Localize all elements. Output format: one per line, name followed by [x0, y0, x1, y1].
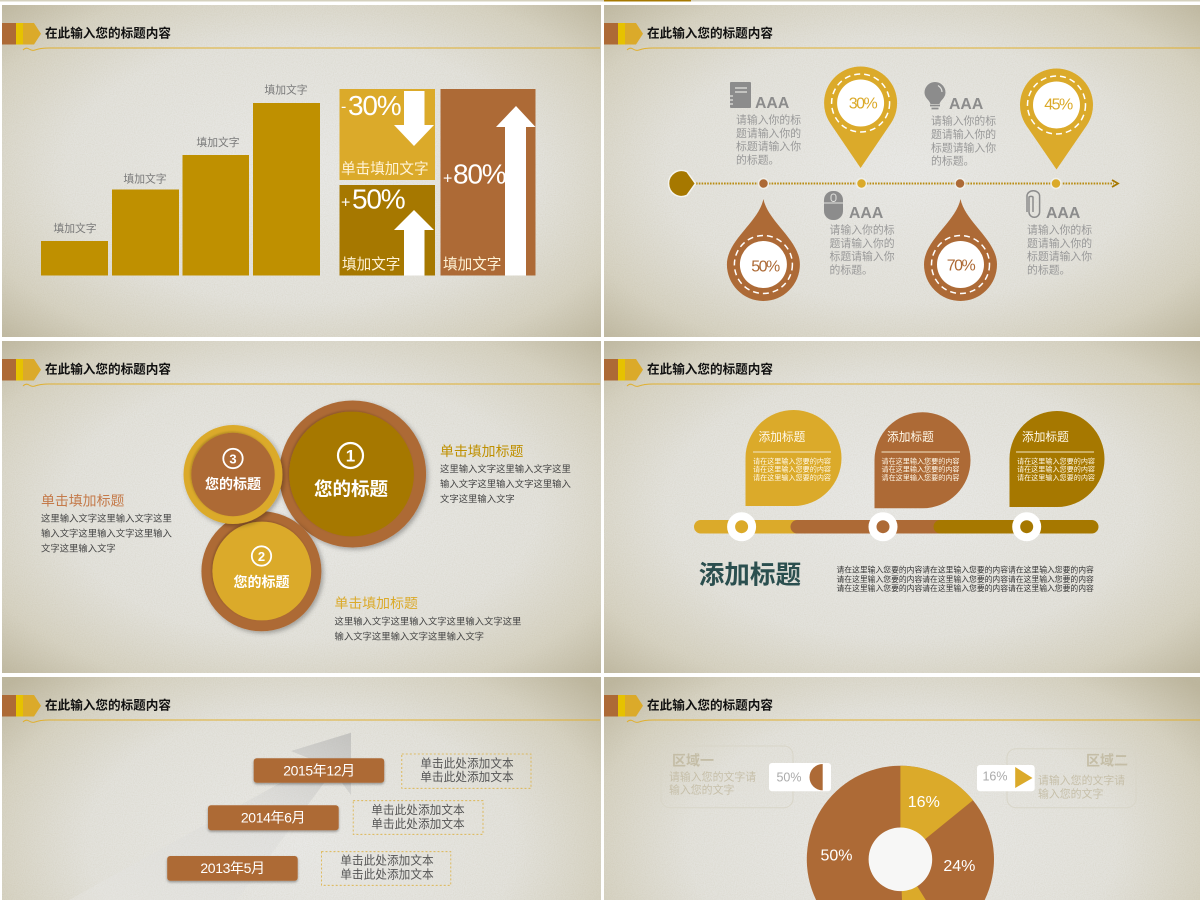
region two: 输入您的文字: [1038, 786, 1103, 800]
stat tile: -30%: [340, 89, 435, 180]
callout 1: 请在这里输入您要的内容: [753, 473, 831, 482]
callout 3: 请在这里输入您要的内容: [1017, 457, 1095, 466]
callout 3: 请在这里输入您要的内容: [1017, 464, 1095, 473]
text block: paper clip: 标题请输入你: [1027, 249, 1092, 263]
text block: notebook: 标题请输入你: [736, 139, 801, 153]
callout 3: 请在这里输入您要的内容: [1017, 473, 1095, 482]
icon: mouse: [824, 191, 843, 220]
text block: bottom: [334, 595, 521, 642]
panel: bar chart slide: [41, 82, 536, 276]
text block: mouse: 题请输入你的: [830, 236, 895, 250]
circle 3: 您的标题: [205, 476, 261, 492]
text block: light bulb: AAA: [949, 96, 983, 113]
text block: left: 输入文字这里输入文字这里输入: [41, 528, 172, 539]
panel: donut chart slide: [661, 746, 1136, 900]
donut chart: [807, 766, 994, 900]
text block: notebook: 请输入你的标: [736, 112, 801, 126]
circle 3: [184, 425, 282, 524]
icon: paper clip: [1027, 191, 1040, 217]
donut chart: 50%: [820, 848, 853, 864]
text block: paper clip: 的标题。: [1027, 262, 1070, 276]
stat tile: +80%: 填加文字: [443, 256, 501, 273]
text block: right: [440, 443, 571, 504]
region two: [1007, 749, 1136, 808]
header: slide 1: [2, 23, 600, 50]
date row 2015: 单击此处添加文本: [420, 756, 514, 770]
circle 1: 1: [346, 446, 355, 466]
circle 1: 您的标题: [314, 478, 388, 500]
circle 2: [201, 511, 321, 631]
callout 2: 添加标题: [887, 430, 934, 444]
header: slide 1: 在此输入您的标题内容: [45, 26, 171, 40]
header: slide 5: 在此输入您的标题内容: [45, 698, 171, 712]
callout 1: 请在这里输入您要的内容: [753, 464, 831, 473]
drop: 70%: 70%: [947, 258, 976, 274]
stat tile: +50%: 50%: [352, 184, 405, 214]
region one: 区域一: [672, 753, 714, 769]
circle 1: [279, 400, 426, 548]
text block: right: 这里输入文字这里输入文字这里: [440, 463, 571, 474]
legend card: 50%: 50%: [776, 770, 802, 784]
segmented progress bar: [694, 516, 1098, 537]
region two: 区域二: [1086, 753, 1128, 769]
header: slide 4: 在此输入您的标题内容: [647, 362, 773, 376]
drop: 50%: 50%: [751, 258, 780, 276]
text block: [836, 564, 1094, 593]
arrow: background growth: [69, 733, 351, 900]
panel: callout timeline slide: [694, 410, 1104, 593]
heading: 添加标题: [699, 560, 801, 590]
text block: notebook: AAA: [755, 95, 789, 112]
text block: mouse: [824, 191, 895, 276]
callout 2: 请在这里输入您要的内容: [882, 473, 960, 482]
stat tile: +50%: [340, 184, 435, 276]
text block: 请在这里输入您要的内容请在这里输入您要的内容请在这里输入您要的内容: [836, 583, 1094, 593]
timeline nodes: [758, 178, 1061, 188]
region two: 请输入您的文字请: [1038, 773, 1125, 787]
text block: bottom: 输入文字这里输入文字这里输入文字: [334, 631, 484, 642]
region one: [661, 746, 793, 808]
callout 1: 添加标题: [758, 430, 806, 444]
bar labels: [53, 82, 308, 235]
bar chart: [41, 103, 320, 276]
pin: 45%: [1020, 69, 1093, 170]
text block: bottom: 这里输入文字这里输入文字这里输入文字这里: [334, 616, 521, 627]
stat tile: +80%: 80%: [453, 158, 506, 190]
callout 2: 请在这里输入您要的内容: [882, 457, 960, 466]
text block: paper clip: [1027, 191, 1092, 276]
date row 2014: [208, 801, 483, 834]
date row 2014: 2014年6月: [241, 810, 305, 826]
text block: notebook: 的标题。: [736, 152, 779, 166]
header: slide 5: [2, 695, 600, 722]
panel: timeline slide: [669, 67, 1118, 301]
stat tile: +50%: +: [341, 194, 350, 212]
region one: 请输入您的文字请: [669, 769, 756, 783]
bar labels: 填加文字: [53, 221, 97, 235]
text block: paper clip: AAA: [1046, 205, 1080, 222]
circle 2: 2: [258, 549, 265, 564]
date row 2015: 2015年12月: [283, 762, 355, 778]
date row 2013: [167, 852, 451, 885]
stat tile: +50%: 填加文字: [342, 256, 400, 273]
circle 2: 您的标题: [234, 574, 290, 590]
text block: right: 输入文字这里输入文字这里输入: [440, 478, 571, 489]
date row 2013: 单击此处添加文本: [340, 854, 434, 868]
text block: left: 文字这里输入文字: [41, 543, 116, 554]
callout 1: [746, 410, 841, 506]
text block: 请在这里输入您要的内容请在这里输入您要的内容请在这里输入您要的内容: [836, 564, 1094, 574]
bar labels: 填加文字: [264, 82, 308, 96]
text block: left: 这里输入文字这里输入文字这里: [41, 513, 172, 524]
date row 2013: 2013年5月: [200, 860, 265, 876]
callout 1: 请在这里输入您要的内容: [753, 457, 831, 466]
text block: paper clip: 请输入你的标: [1027, 222, 1092, 236]
legend card: 50%: [769, 763, 831, 791]
date row 2015: 单击此处添加文本: [420, 770, 514, 784]
text block: left: [41, 493, 172, 554]
pin: 30%: 30%: [849, 96, 878, 112]
panel: circles slide: [41, 400, 571, 642]
donut chart: 16%: [908, 794, 940, 811]
text block: light bulb: 标题请输入你: [931, 140, 996, 154]
header: slide 2: [604, 23, 1200, 50]
legend card: 16%: 16%: [982, 770, 1008, 784]
date row 2013: 单击此处添加文本: [340, 868, 434, 882]
stat tile: +80%: [440, 89, 536, 276]
stat tile: +80%: +: [443, 170, 452, 188]
header: slide 6: [604, 695, 1200, 722]
text block: right: 单击填加标题: [440, 443, 523, 459]
region one: 输入您的文字: [669, 783, 734, 797]
header: slide 4: [604, 359, 1200, 386]
icon: notebook: [730, 82, 751, 108]
stat tile: -30%: -: [341, 98, 346, 116]
header: slide 3: 在此输入您的标题内容: [45, 362, 171, 376]
text block: light bulb: 请输入你的标: [931, 114, 996, 128]
text block: light bulb: 的标题。: [931, 154, 974, 168]
text block: mouse: 标题请输入你: [830, 249, 895, 263]
pin: 45%: 45%: [1044, 96, 1073, 114]
stat tile: -30%: 单击填加文字: [341, 160, 429, 178]
callout 3: [1010, 411, 1104, 507]
text block: mouse: 的标题。: [830, 262, 873, 276]
date row 2014: 单击此处添加文本: [371, 803, 465, 817]
icon: light bulb: [924, 82, 946, 108]
bar labels: 填加文字: [123, 172, 167, 186]
text block: paper clip: 题请输入你的: [1027, 236, 1092, 250]
timeline dotted axis: [696, 180, 1118, 187]
panel: date timeline slide: [69, 733, 531, 900]
callout 2: 请在这里输入您要的内容: [882, 464, 960, 473]
text block: right: 文字这里输入文字: [440, 493, 515, 504]
text block: 请在这里输入您要的内容请在这里输入您要的内容请在这里输入您要的内容: [836, 574, 1094, 584]
text block: mouse: AAA: [849, 205, 883, 222]
callout 2: [874, 412, 970, 508]
text block: light bulb: [924, 82, 996, 168]
text block: light bulb: 题请输入你的: [931, 127, 996, 141]
donut chart: 24%: [943, 858, 975, 875]
header: slide 2: 在此输入您的标题内容: [647, 26, 773, 40]
pin: 30%: [824, 67, 897, 168]
text block: left: 单击填加标题: [41, 493, 124, 509]
text block: bottom: 单击填加标题: [334, 595, 418, 611]
legend card: 16%: [977, 765, 1035, 791]
stat tile: -30%: 30%: [348, 90, 401, 121]
bar labels: 填加文字: [196, 135, 240, 149]
date row 2015: [254, 754, 531, 788]
callout 3: 添加标题: [1022, 430, 1069, 444]
text block: mouse: 请输入你的标: [830, 222, 895, 236]
header: slide 6: 在此输入您的标题内容: [647, 698, 773, 712]
text block: notebook: 题请输入你的: [736, 126, 801, 140]
header: slide 3: [2, 359, 600, 386]
date row 2014: 单击此处添加文本: [371, 817, 465, 831]
drop: 50%: [727, 199, 800, 301]
circle 3: 3: [229, 452, 237, 466]
timeline start pin: [669, 170, 696, 196]
text block: notebook: [730, 82, 801, 166]
drop: 70%: [924, 199, 997, 301]
